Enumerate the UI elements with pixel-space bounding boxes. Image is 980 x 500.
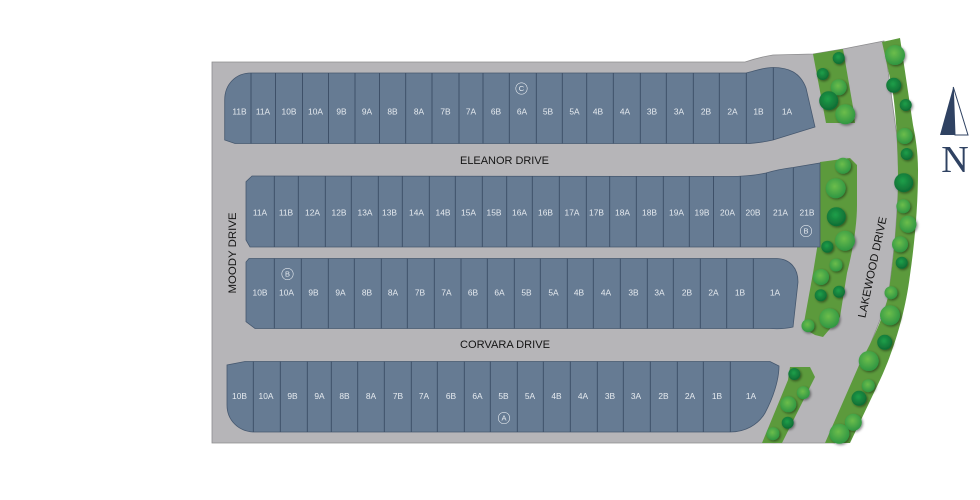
lot row B: north of Corvara Drive, upper: 14B (436, 208, 451, 218)
lot row C: north of Eleanor Drive: 4B (593, 107, 604, 117)
lot row B: north of Corvara Drive, upper: 17B (589, 208, 604, 218)
north arrow: N (941, 139, 969, 181)
north arrow (940, 87, 969, 181)
lot row C: north of Eleanor Drive: 11B (232, 107, 247, 117)
lot row C: north of Eleanor Drive (225, 68, 815, 144)
lot row A: south of Corvara Drive (227, 362, 779, 432)
lot row C: north of Eleanor Drive: 7A (466, 107, 477, 117)
lot row B: north of Corvara Drive, upper: 20B (746, 208, 761, 218)
lot row A: south of Corvara Drive: 7B (393, 391, 404, 401)
lot row A: south of Corvara Drive: 4B (551, 391, 562, 401)
lot row A: south of Corvara Drive: 10A (259, 391, 274, 401)
lot row B: north of Corvara Drive, upper: 21A (773, 208, 788, 218)
lot row B: north of Corvara Drive, upper: 15A (461, 208, 476, 218)
lot row C: north of Eleanor Drive: 8A (414, 107, 425, 117)
lot row B: north of Corvara Drive, upper: 17A (565, 208, 580, 218)
lot row C: north of Eleanor Drive: 3A (674, 107, 685, 117)
lot row B: north of Corvara Drive, upper: 19B (695, 208, 710, 218)
lot row A: south of Corvara Drive: 4A (578, 391, 589, 401)
lot row B: north of Corvara Drive, lower: 4A (601, 288, 612, 298)
lot row C: north of Eleanor Drive: 9A (362, 107, 373, 117)
lot row B: north of Corvara Drive, lower: 3A (654, 288, 665, 298)
lot row A: south of Corvara Drive: 8B (339, 391, 350, 401)
lot row A: south of Corvara Drive: 3A (631, 391, 642, 401)
lot row B: north of Corvara Drive, upper: 13B (382, 208, 397, 218)
green strip: Lakewood Drive verge (825, 38, 918, 443)
lot row A: south of Corvara Drive: 2B (658, 391, 669, 401)
lot row B: north of Corvara Drive, upper: 13A (358, 208, 373, 218)
green island: south (762, 367, 815, 443)
lot row C: north of Eleanor Drive: 4A (620, 107, 631, 117)
lot row B: north of Corvara Drive, lower: 9B (308, 288, 319, 298)
lot row A: south of Corvara Drive: 8A (366, 391, 377, 401)
lot row B: north of Corvara Drive, upper: 19A (669, 208, 684, 218)
lot row C: north of Eleanor Drive: 10A (308, 107, 323, 117)
road label: Lakewood Drive: LAKEWOOD DRIVE (856, 216, 890, 319)
lot row C: north of Eleanor Drive: 6B (491, 107, 502, 117)
lot row B: north of Corvara Drive, lower: 10A (279, 288, 294, 298)
lot row A: south of Corvara Drive: 1B (712, 391, 723, 401)
lot row B: north of Corvara Drive, lower: 2A (708, 288, 719, 298)
lot row B: north of Corvara Drive, lower: 8B (362, 288, 373, 298)
lot row B: north of Corvara Drive, upper: B (803, 227, 809, 236)
lot row B: north of Corvara Drive, upper: 18B (642, 208, 657, 218)
green island: north (813, 49, 855, 123)
lot row C: north of Eleanor Drive: 10B (282, 107, 297, 117)
lot row A: south of Corvara Drive: 6A (472, 391, 483, 401)
lot row C: north of Eleanor Drive: 7B (440, 107, 451, 117)
lot row A: south of Corvara Drive: 7A (419, 391, 430, 401)
lot row C: north of Eleanor Drive: 5B (543, 107, 554, 117)
lot row B: north of Corvara Drive, upper: 18A (615, 208, 630, 218)
lot row A: south of Corvara Drive: 6B (446, 391, 457, 401)
lot row B: north of Corvara Drive, upper: 21B (800, 208, 815, 218)
lot row B: north of Corvara Drive, upper: 12A (305, 208, 320, 218)
lot row B: north of Corvara Drive, upper: 14A (409, 208, 424, 218)
road label: Eleanor Drive: ELEANOR DRIVE (460, 155, 549, 167)
trees: south island (766, 368, 810, 440)
lot row B: north of Corvara Drive, lower: 2B (682, 288, 693, 298)
lot row A: south of Corvara Drive: 5B (498, 391, 509, 401)
lot row B: north of Corvara Drive, lower (246, 258, 798, 329)
lot row C: north of Eleanor Drive: 11A (256, 107, 271, 117)
lot row B: north of Corvara Drive, lower: 10B (253, 288, 268, 298)
lot row B: north of Corvara Drive, upper (246, 163, 820, 247)
lot row B: north of Corvara Drive, upper: 16A (512, 208, 527, 218)
lot row A: south of Corvara Drive: 9B (287, 391, 298, 401)
trees: Lakewood verge (829, 45, 916, 444)
lot row A: south of Corvara Drive: 3B (605, 391, 616, 401)
lot row B: north of Corvara Drive, lower: 9A (335, 288, 346, 298)
lot row C: north of Eleanor Drive: 1A (782, 107, 793, 117)
lot row A: south of Corvara Drive: A (501, 414, 507, 423)
lot row A: south of Corvara Drive: 1A (746, 391, 757, 401)
lot row B: north of Corvara Drive, upper: 11B (279, 208, 294, 218)
lot row B: north of Corvara Drive, lower: 1B (735, 288, 746, 298)
lot row B: north of Corvara Drive, lower: 7A (441, 288, 452, 298)
lot row B: north of Corvara Drive, lower: 8A (388, 288, 399, 298)
lot row C: north of Eleanor Drive: 1B (753, 107, 764, 117)
lot row B: north of Corvara Drive, lower: 6B (468, 288, 479, 298)
lot row C: north of Eleanor Drive: C (519, 84, 525, 93)
lot row A: south of Corvara Drive: 5A (525, 391, 536, 401)
lot row B: north of Corvara Drive, lower: 6A (494, 288, 505, 298)
trees: north island (817, 52, 855, 124)
lot row B: north of Corvara Drive, lower: 7B (415, 288, 426, 298)
lot row A: south of Corvara Drive: 9A (314, 391, 325, 401)
green island: middle (803, 158, 857, 337)
lot row A: south of Corvara Drive: 2A (685, 391, 696, 401)
lot row B: north of Corvara Drive, lower: 5B (521, 288, 532, 298)
lot row B: north of Corvara Drive, upper: 11A (253, 208, 268, 218)
lot row C: north of Eleanor Drive: 6A (517, 107, 528, 117)
lot row C: north of Eleanor Drive: 9B (336, 107, 347, 117)
lot row B: north of Corvara Drive, lower: 4B (574, 288, 585, 298)
lot row B: north of Corvara Drive, upper: 12B (332, 208, 347, 218)
lot row B: north of Corvara Drive, upper: 15B (487, 208, 502, 218)
lot row B: north of Corvara Drive, upper: 20A (720, 208, 735, 218)
lot row C: north of Eleanor Drive: 2A (727, 107, 738, 117)
lot row C: north of Eleanor Drive: 3B (647, 107, 658, 117)
lot row B: north of Corvara Drive, lower: 3B (628, 288, 639, 298)
road surface (212, 41, 899, 443)
lot row B: north of Corvara Drive, lower: 5A (548, 288, 559, 298)
lot row C: north of Eleanor Drive: 5A (569, 107, 580, 117)
lot row B: north of Corvara Drive, lower: 1A (770, 288, 781, 298)
lot row B: north of Corvara Drive, lower: B (285, 270, 290, 279)
road label: Moody Drive: MOODY DRIVE (227, 212, 239, 294)
lot row A: south of Corvara Drive: 10B (232, 391, 247, 401)
road label: Corvara Drive: CORVARA DRIVE (460, 339, 550, 351)
lot row C: north of Eleanor Drive: 8B (387, 107, 398, 117)
trees: middle island (802, 158, 855, 332)
lot row B: north of Corvara Drive, upper: 16B (538, 208, 553, 218)
lot row C: north of Eleanor Drive: 2B (701, 107, 712, 117)
